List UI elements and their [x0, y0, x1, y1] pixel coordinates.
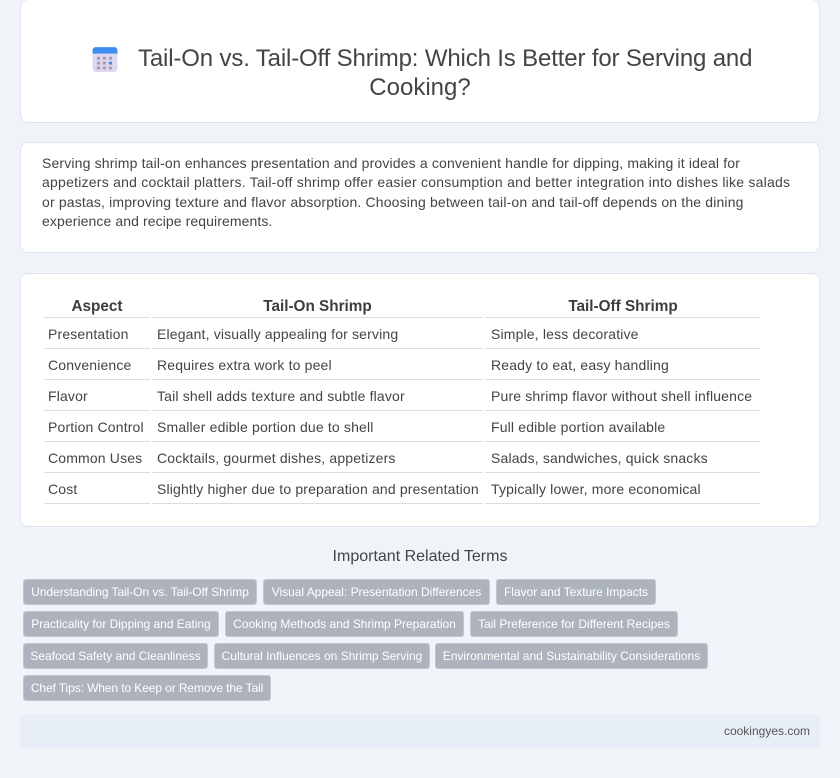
table header: Tail-On Shrimp [263, 298, 372, 315]
row: portion control: Portion Control [48, 419, 144, 435]
title: Tail-On vs. Tail-Off Shrimp: Which Is Better for Serving and [138, 45, 752, 72]
table header: Tail-Off Shrimp [568, 298, 678, 315]
tag: Chef Tips: When to Keep or Remove the Tail [31, 681, 263, 695]
row: portion control: Full edible portion available [491, 419, 665, 435]
title [138, 45, 752, 101]
summary text [42, 155, 790, 229]
tag: Cooking Methods and Shrimp Preparation [233, 617, 456, 631]
row: presentation: Simple, less decorative [491, 326, 639, 342]
row: portion control: Smaller edible portion due to shell [157, 419, 374, 435]
tag [23, 611, 219, 637]
row: common uses: Cocktails, gourmet dishes, appetizers [157, 450, 396, 466]
tag [496, 579, 656, 605]
row: convenience: Requires extra work to peel [157, 357, 332, 373]
tag: Cultural Influences on Shrimp Serving [222, 649, 422, 663]
tag: Seafood Safety and Cleanliness [30, 649, 201, 663]
panel: comparison table [20, 273, 820, 527]
row: convenience: Ready to eat, easy handling [491, 357, 669, 373]
icon: calendar [92, 47, 118, 72]
tag: Practicality for Dipping and Eating [31, 617, 211, 631]
tag [263, 579, 490, 605]
row: portion control [48, 419, 665, 435]
tag: Tail Preference for Different Recipes [478, 617, 670, 631]
row: flavor [48, 388, 752, 404]
row: flavor: Pure shrimp flavor without shell influence [491, 388, 752, 404]
row: presentation: Elegant, visually appealing for serving [157, 326, 398, 342]
tag [23, 675, 271, 701]
tag [470, 611, 678, 637]
row: common uses [48, 450, 708, 466]
row: common uses: Salads, sandwiches, quick snacks [491, 450, 708, 466]
tag: Flavor and Texture Impacts [504, 585, 648, 599]
row: cost: Cost [48, 481, 77, 497]
row: common uses: Common Uses [48, 450, 142, 466]
header panel [20, 0, 820, 123]
table header [71, 298, 678, 315]
tag [214, 643, 430, 669]
tag [23, 643, 208, 669]
summary text: experience and recipe requirements. [42, 213, 272, 229]
row: flavor: Tail shell adds texture and subtle flavor [157, 388, 405, 404]
panel: summary [20, 142, 820, 253]
row: convenience: Convenience [48, 357, 131, 373]
summary text: appetizers and cocktail platters. Tail-off shrimp offer easier consumption and better integration into dishes like salads [42, 174, 790, 190]
tag: Understanding Tail-On vs. Tail-Off Shrimp [31, 585, 249, 599]
tag [23, 579, 257, 605]
tag [225, 611, 464, 637]
footer bar [20, 714, 820, 748]
related terms tags [23, 579, 708, 701]
tag: Visual Appeal: Presentation Differences [272, 585, 481, 599]
row: convenience [48, 357, 669, 373]
footer source: cookingyes.com [724, 724, 810, 738]
title: Cooking? [369, 74, 471, 101]
summary text: Serving shrimp tail-on enhances presentation and provides a convenient handle for dipping, making it ideal for [42, 155, 740, 171]
row: cost: Typically lower, more economical [491, 481, 701, 497]
row: flavor: Flavor [48, 388, 88, 404]
row: cost: Slightly higher due to preparation and presentation [157, 481, 479, 497]
row: presentation: Presentation [48, 326, 129, 342]
row: presentation [48, 326, 639, 342]
tag: Environmental and Sustainability Considerations [443, 649, 700, 663]
tag [435, 643, 708, 669]
summary text: or pastas, improving texture and flavor absorption. Choosing between tail-on and tail-off depends on the dining [42, 194, 744, 210]
heading: related terms: Important Related Terms [333, 548, 507, 565]
table header: Aspect [71, 298, 122, 315]
row: cost [48, 481, 701, 497]
